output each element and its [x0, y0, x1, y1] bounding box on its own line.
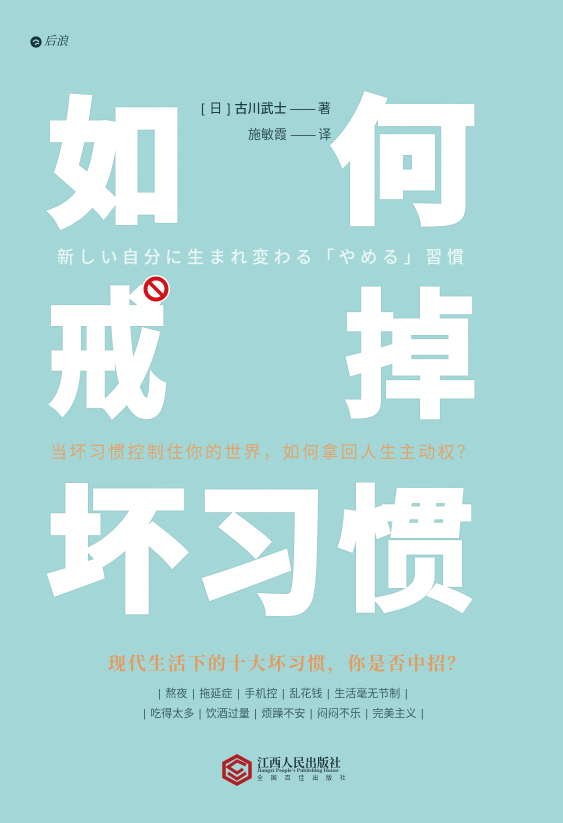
bold question: 现代生活下的十大坏习惯，你是否中招？	[108, 654, 467, 674]
author line: [ 日 ] 古川武士 —— 著	[201, 101, 331, 116]
title line 1: 如	[48, 89, 183, 242]
japanese subtitle: 新しい自分に生まれ変わる「やめる」習慣	[57, 248, 469, 267]
title line 2: 掉	[344, 281, 477, 434]
publisher english name: Jiangxi People's Publishing House	[257, 768, 339, 774]
habit list row 1: | 熬夜 | 拖延症 | 手机控 | 乱花钱 | 生活毫无节制 |	[158, 688, 408, 700]
title line 3: 习	[194, 477, 327, 632]
icon: prohibition sign	[142, 275, 170, 302]
translator line: 施敏霞 —— 译	[248, 127, 331, 142]
orange tagline: 当坏习惯控制住你的世界，如何拿回人生主动权？	[50, 443, 476, 462]
title line 1: 何	[331, 88, 475, 240]
publisher logo	[222, 754, 252, 786]
title line 3: 惯	[337, 477, 474, 628]
publisher slogan: 全国百佳出版社	[257, 776, 354, 782]
title line 2	[47, 281, 477, 434]
habit list row 2: | 吃得太多 | 饮酒过量 | 烦躁不安 | 闷闷不乐 | 完美主义 |	[143, 708, 424, 720]
title line 3: 坏	[48, 476, 186, 628]
title line 3	[48, 476, 474, 632]
title line 1	[48, 88, 475, 242]
publisher mark: 后浪: 后浪	[44, 34, 68, 48]
publisher name: 江西人民出版社	[257, 756, 341, 770]
publisher mark: 后浪	[30, 34, 69, 48]
title line 2: 戒	[47, 281, 167, 434]
